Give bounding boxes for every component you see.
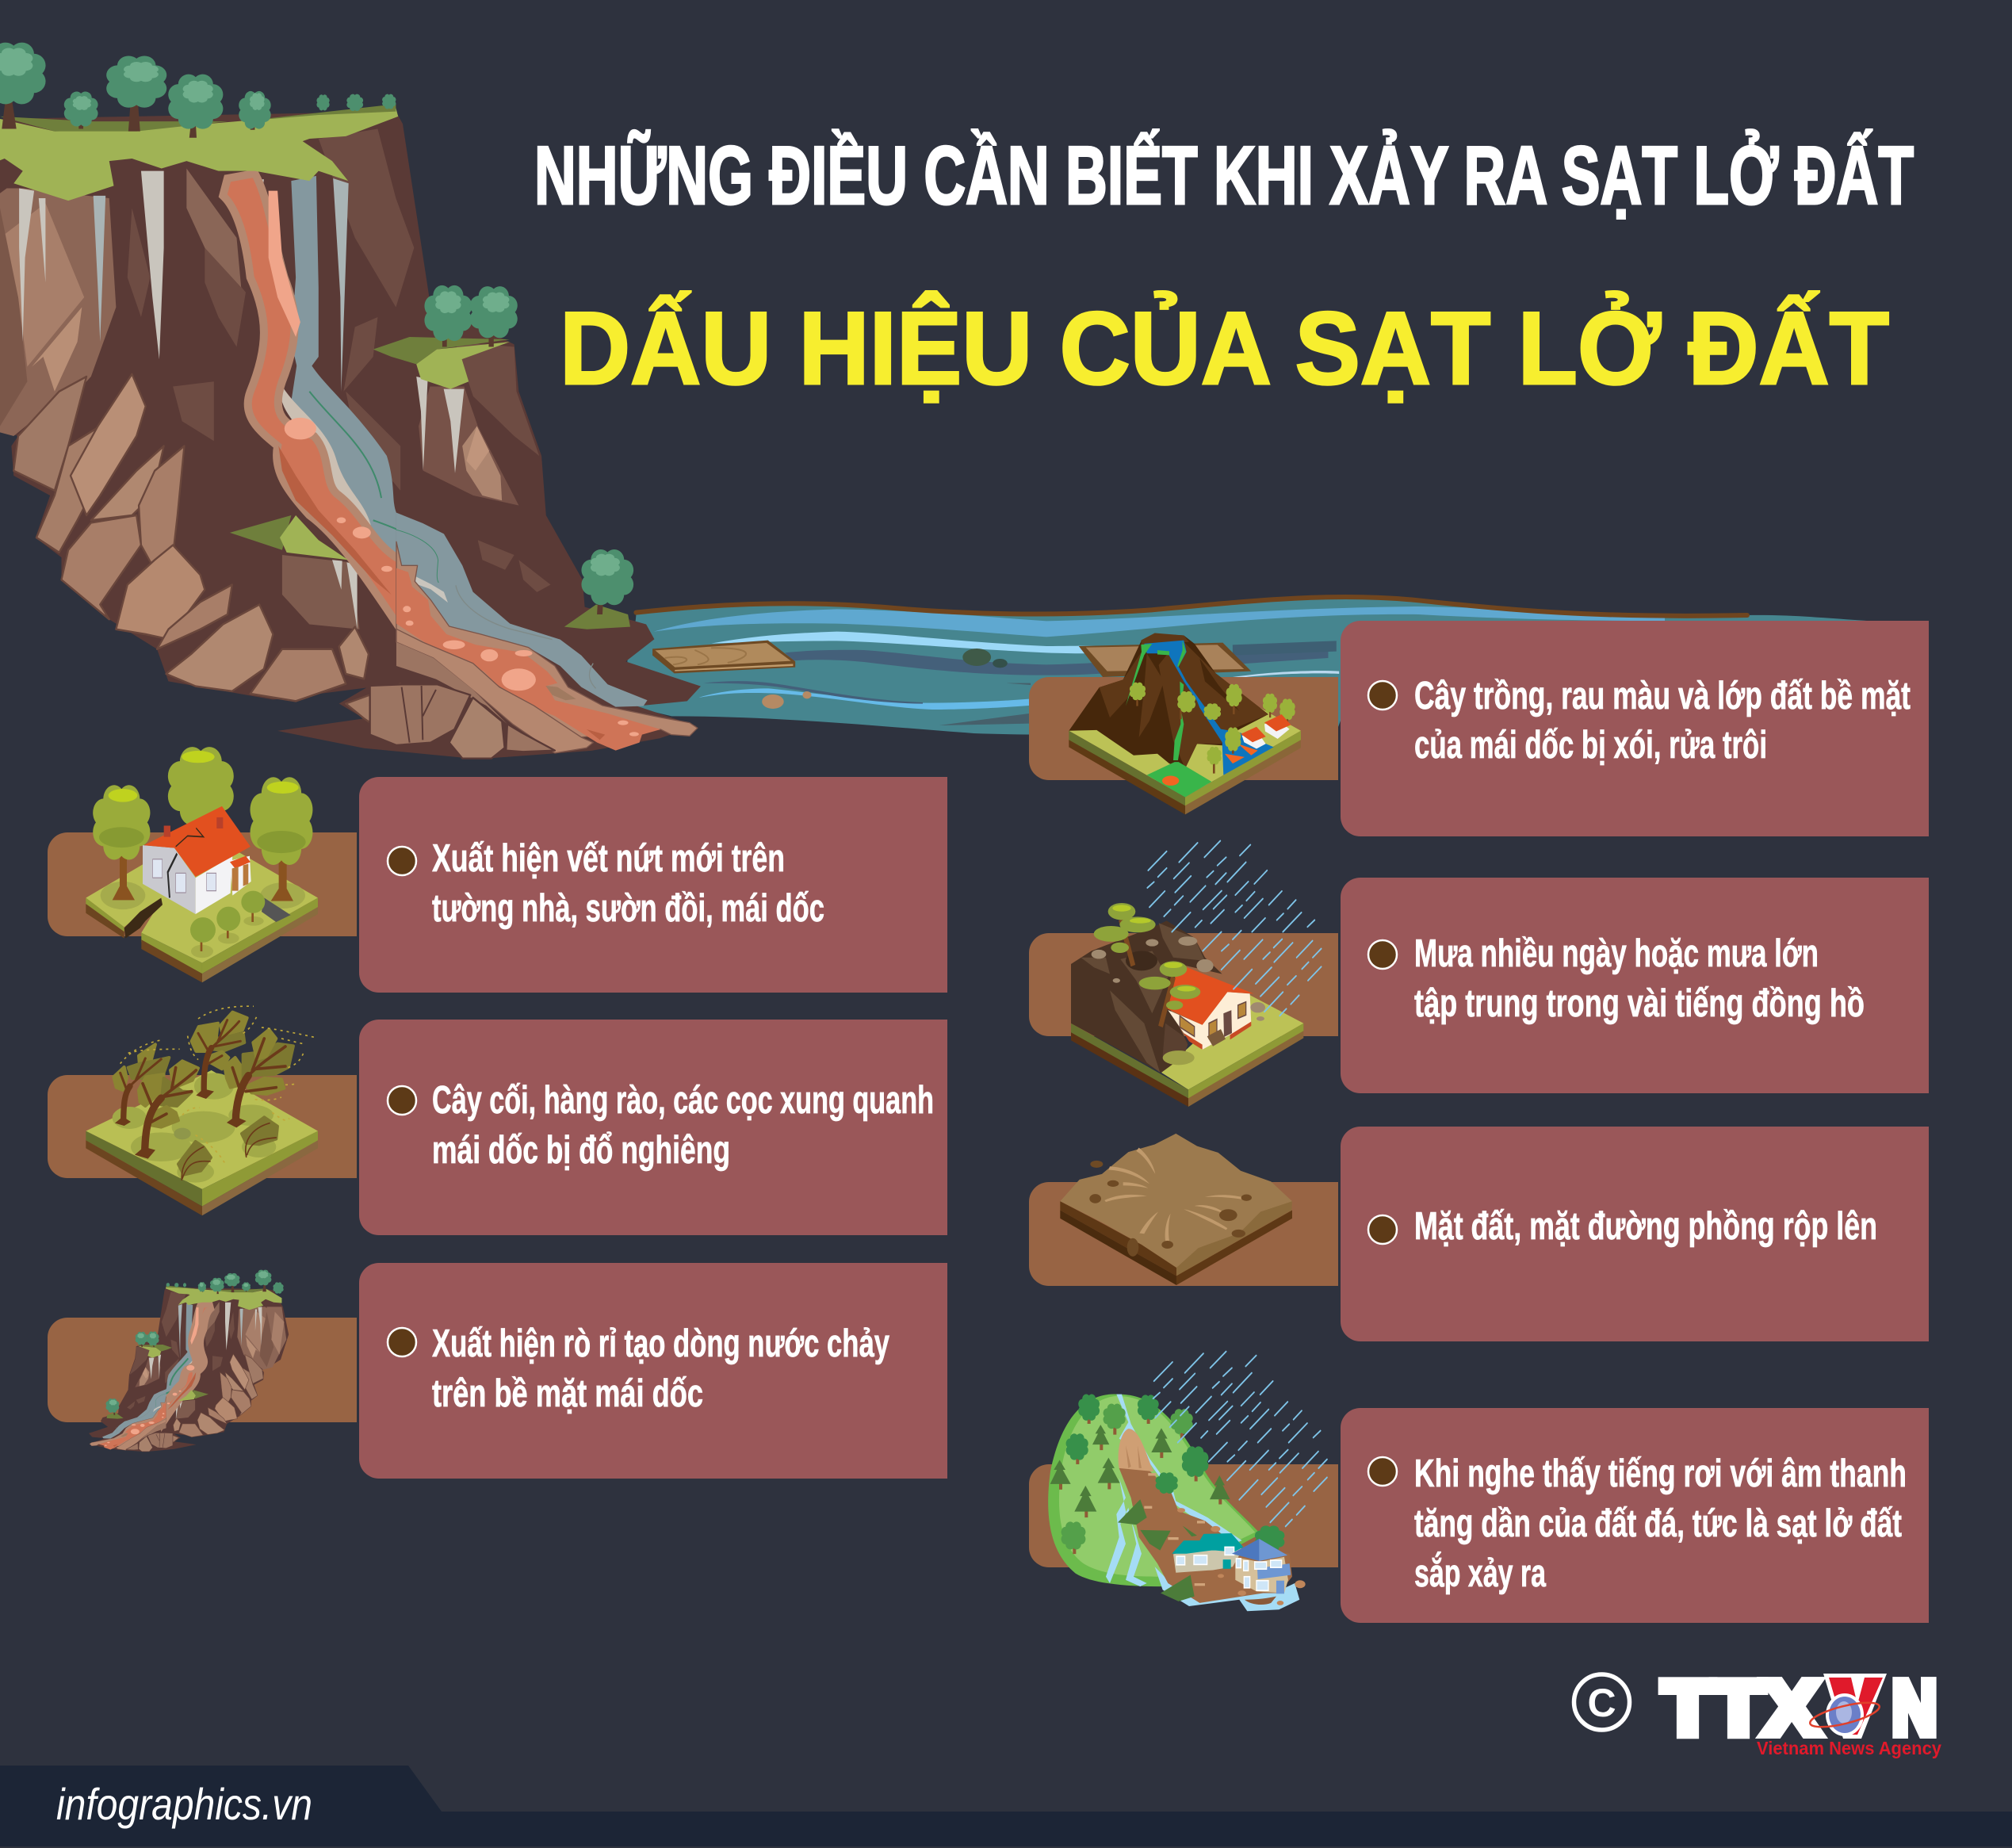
panel: new cracks: tường nhà, sườn đồi, mái dốc (432, 887, 824, 930)
panel: seepage (359, 1263, 947, 1479)
icon: green hill landslide with houses in rain (1048, 1352, 1327, 1611)
panel: new cracks: Xuất hiện vết nứt mới trên (432, 837, 785, 880)
logo: TTXVN: N (1892, 1666, 1937, 1750)
right brown bars (1029, 677, 1338, 1567)
panel: falling sounds: sắp xảy ra (1414, 1551, 1547, 1595)
copyright symbol (1574, 1674, 1630, 1730)
panel: leaning trees: Cây cối, hàng rào, các cọc xung quanh (432, 1079, 934, 1122)
panel: leaning trees: mái dốc bị đổ nghiêng (432, 1129, 730, 1172)
icon: wind-bent trees on platform (86, 1006, 318, 1215)
panel: erosion (1341, 621, 1929, 836)
logo: TTXVN: TTX (1662, 1666, 1819, 1750)
footer bar (0, 1766, 2012, 1846)
icon: bulging ground (1060, 1134, 1292, 1285)
panel: falling sounds (1341, 1408, 1929, 1623)
panel: new cracks (359, 777, 947, 993)
subtitle: DẤU HIỆU CỦA SẠT LỞ ĐẤT (560, 290, 1889, 406)
logo: TTXVN: Vietnam News Agency (1757, 1738, 1941, 1758)
panel: heavy rain: tập trung trong vài tiếng đồng hồ (1414, 982, 1865, 1025)
panel: bulging ground (1341, 1127, 1929, 1341)
icon: cracked house on platform (86, 747, 318, 982)
icon: mountain with river on platform (1069, 633, 1301, 814)
website label: infographics.vn (56, 1779, 312, 1829)
icon: small mirrored cliff (89, 1270, 289, 1452)
panel: heavy rain (1341, 878, 1929, 1093)
logo: TTXVN (1662, 1666, 1941, 1758)
big landslide cliff illustration (0, 43, 701, 759)
panel: heavy rain: Mưa nhiều ngày hoặc mưa lớn (1414, 932, 1819, 975)
icon: slope collapsing on house in rain (1071, 841, 1322, 1107)
panel: erosion: của mái dốc bị xói, rửa trôi (1414, 724, 1767, 767)
panel: leaning trees (359, 1020, 947, 1235)
panel: seepage: trên bề mặt mái dốc (432, 1372, 703, 1415)
left brown bars (48, 832, 357, 1422)
copyright symbol: C (1587, 1681, 1616, 1725)
river illustration (627, 597, 1925, 735)
panel: seepage: Xuất hiện rò rỉ tạo dòng nước chảy (432, 1322, 889, 1365)
